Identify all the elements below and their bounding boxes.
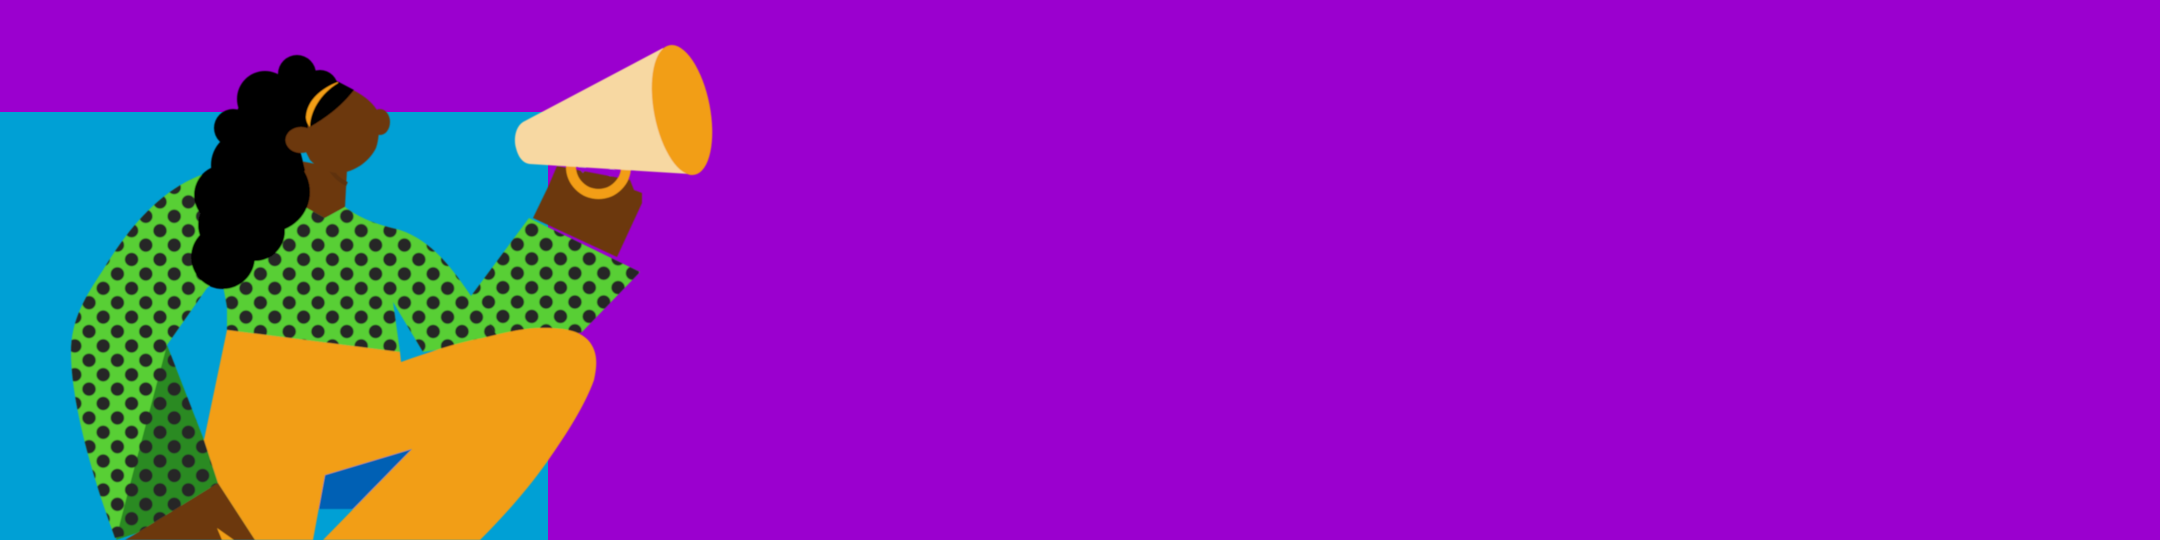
left sleeve <box>71 172 270 540</box>
head <box>286 82 390 173</box>
neck <box>295 160 347 218</box>
hair front over forehead <box>304 80 354 127</box>
torso and upper arm <box>222 207 500 352</box>
left ear <box>286 127 316 153</box>
megaphone handle ring <box>571 139 626 194</box>
raised hand <box>533 166 642 257</box>
sleeve shaded fold <box>116 345 218 540</box>
hand finger gap <box>217 528 234 540</box>
headband <box>306 82 338 127</box>
megaphone bell opening <box>642 40 722 180</box>
lower hand <box>125 483 255 540</box>
orange trousers <box>204 328 596 540</box>
megaphone cone <box>515 48 690 174</box>
blue panel <box>0 112 548 540</box>
forearm sleeve <box>450 218 640 350</box>
hair <box>191 55 338 289</box>
right ear <box>370 109 390 135</box>
seat shadow <box>318 449 412 509</box>
figure: woman with megaphone <box>71 40 722 540</box>
